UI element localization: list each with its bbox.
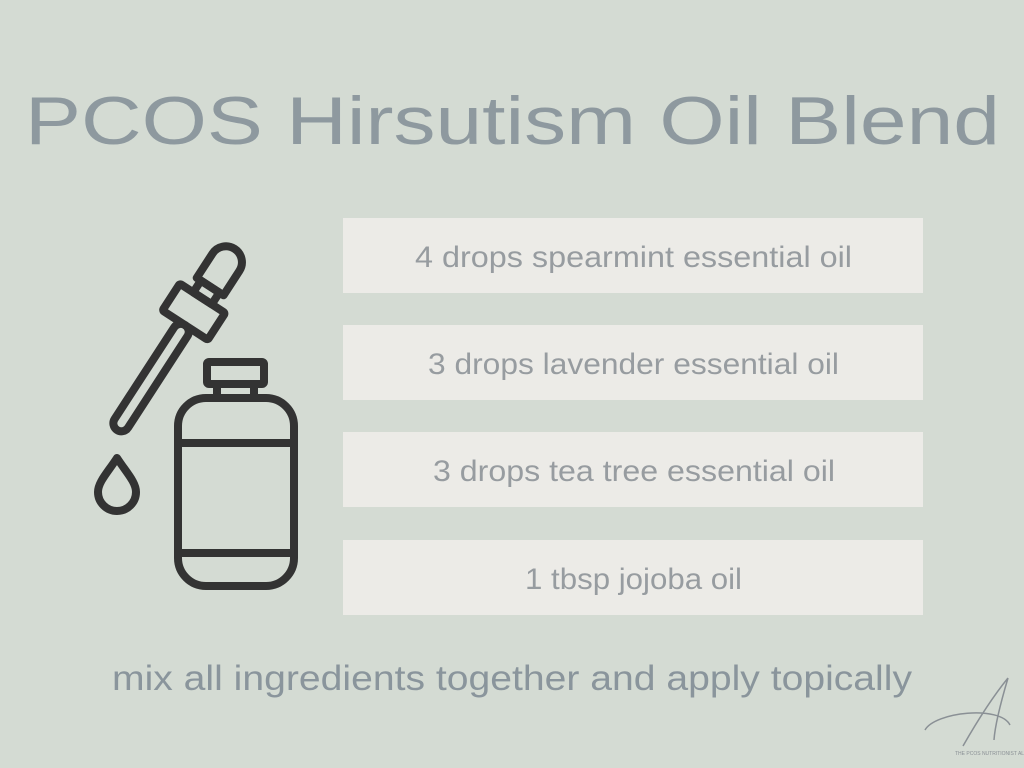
ingredient: jojoba xyxy=(343,540,923,615)
ingredient: tea tree: 3 drops tea tree essential oil xyxy=(433,455,835,488)
ingredient: jojoba: 1 tbsp jojoba oil xyxy=(525,563,742,596)
icon: bottle xyxy=(178,362,294,586)
icon: drop xyxy=(98,458,136,511)
instructions: mix all ingredients together and apply topically xyxy=(112,659,913,698)
title: PCOS Hirsutism Oil Blend xyxy=(25,83,1000,159)
ingredient: spearmint: 4 drops spearmint essential oil xyxy=(415,241,852,274)
ingredient: tea tree xyxy=(343,432,923,507)
logo xyxy=(925,678,1024,757)
icon: dropper xyxy=(94,234,257,445)
icon: dropper and bottle xyxy=(94,234,294,586)
ingredient: lavender: 3 drops lavender essential oil xyxy=(428,348,839,381)
ingredient: spearmint xyxy=(343,218,923,293)
ingredient list xyxy=(343,218,923,615)
ingredient: lavender xyxy=(343,325,923,400)
